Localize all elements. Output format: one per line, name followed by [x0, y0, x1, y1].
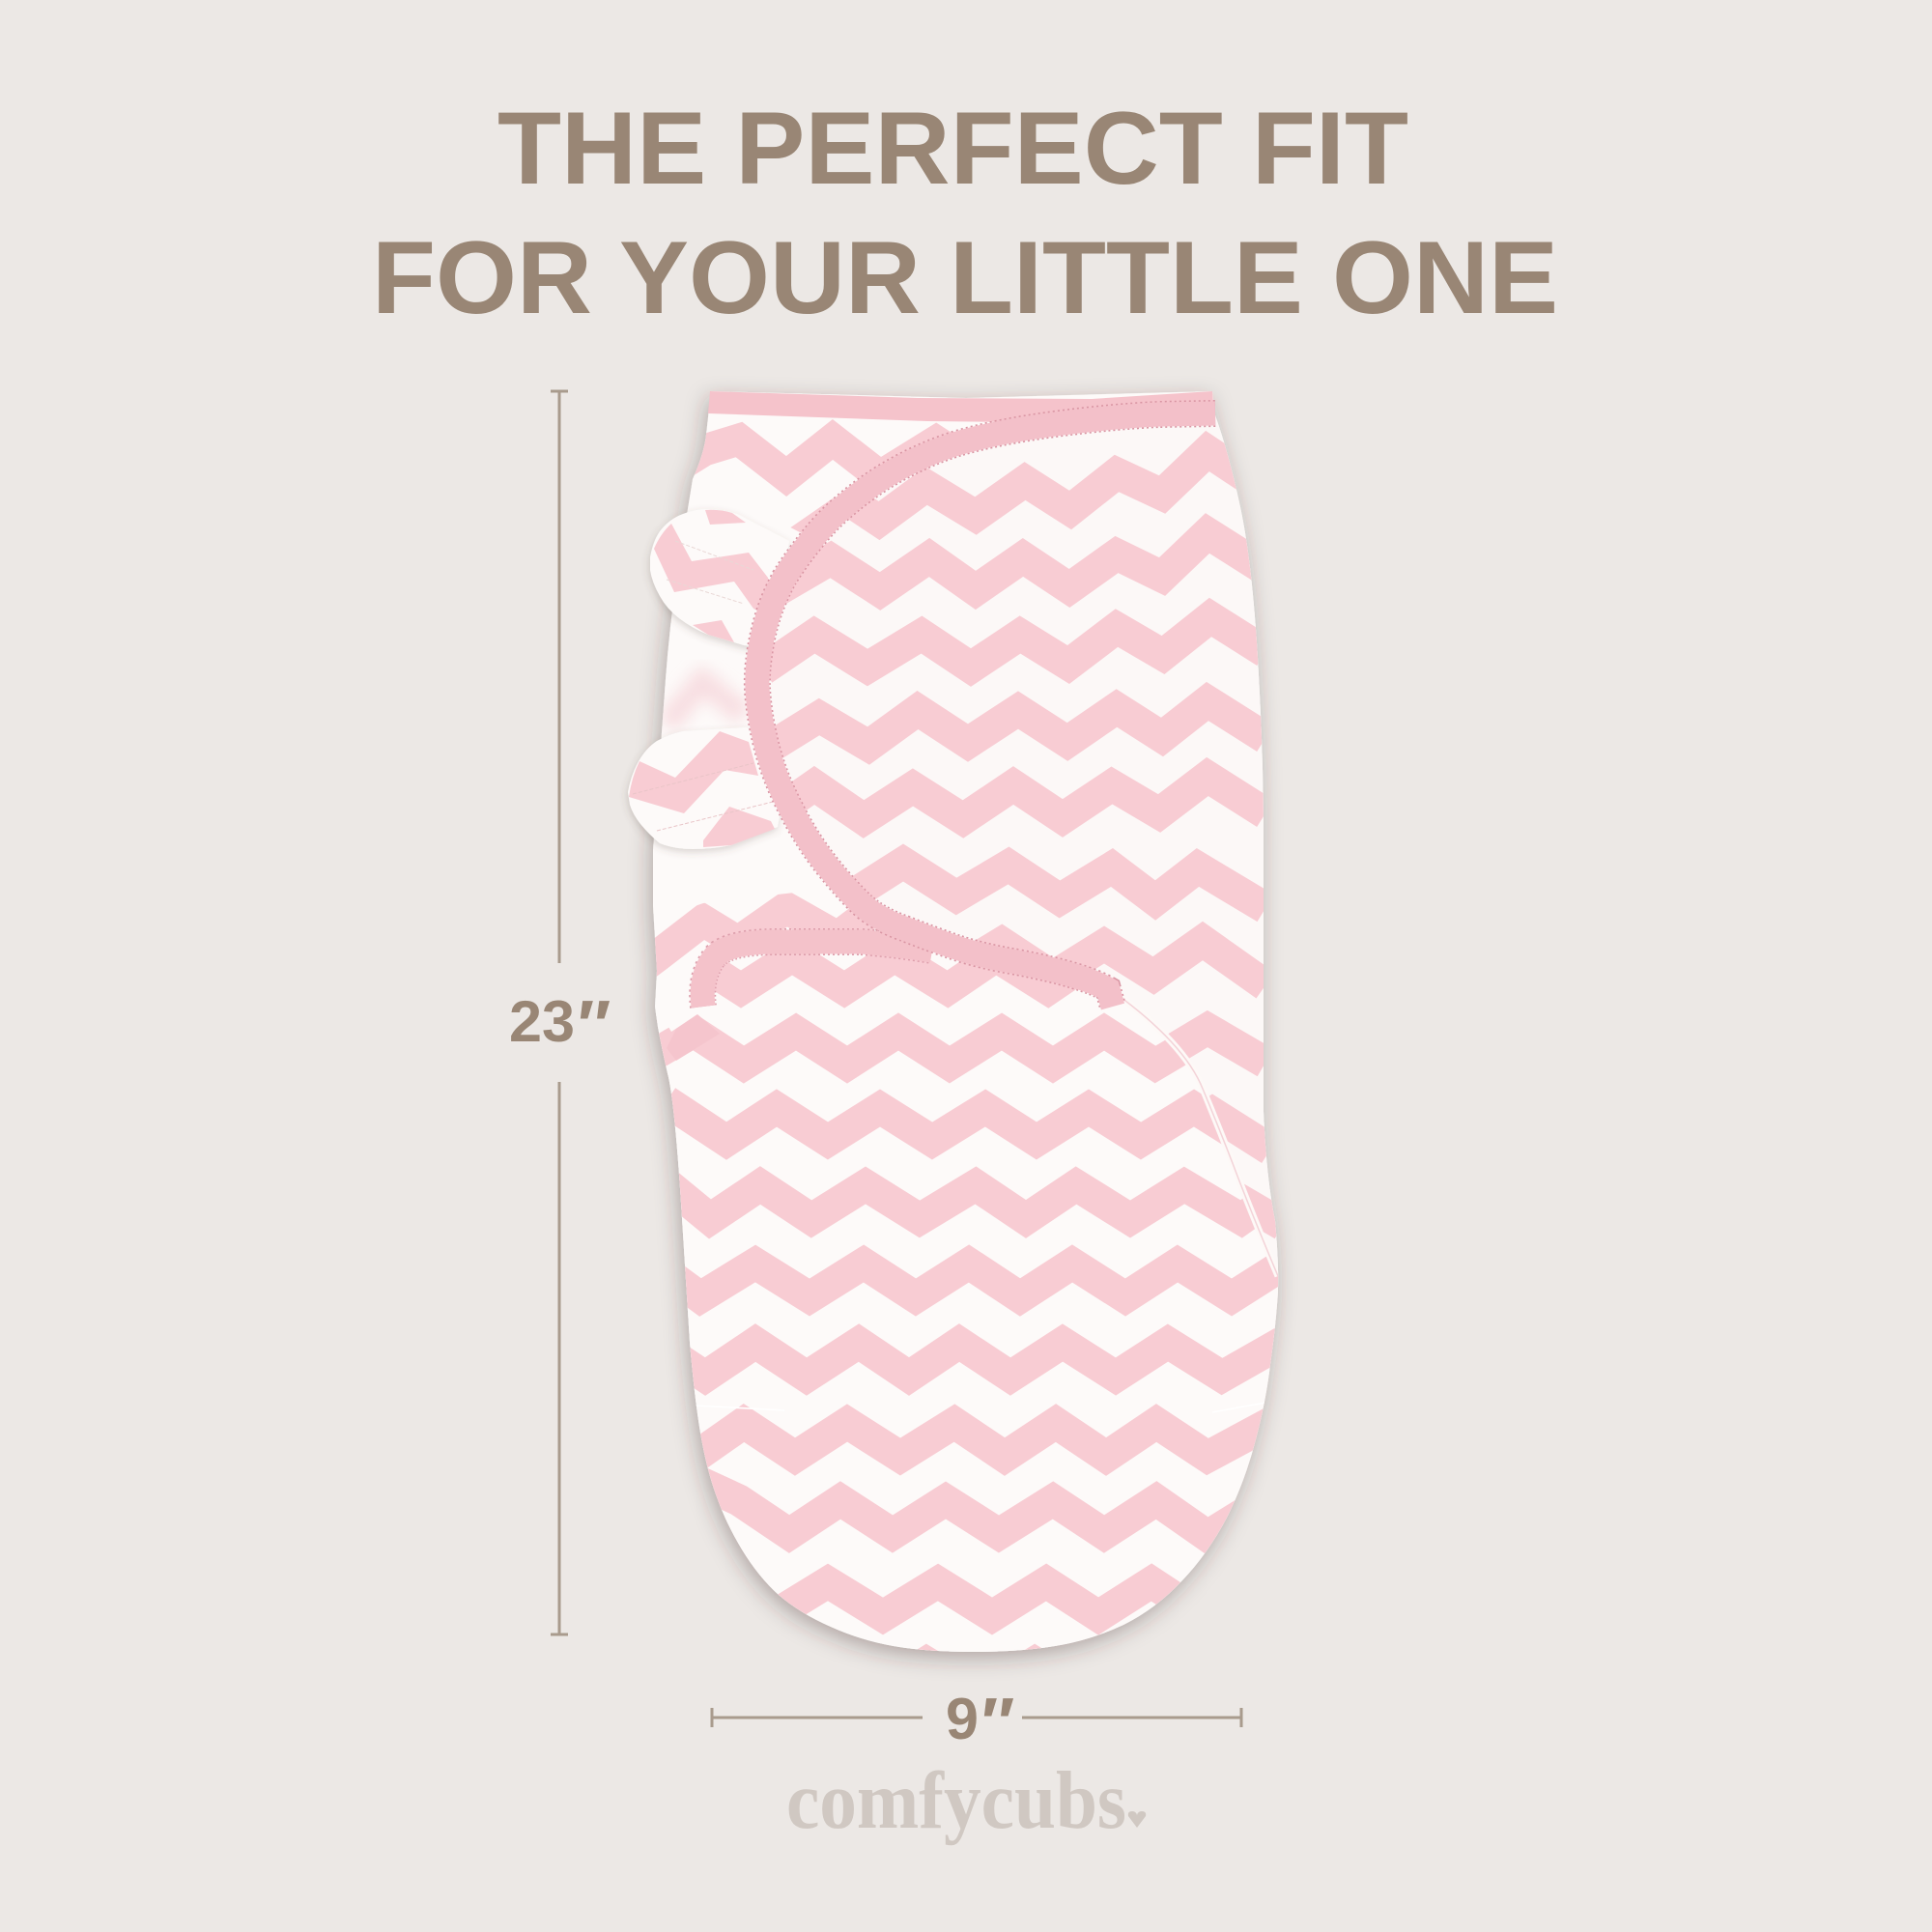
width dimension: 9 inches: ″: [978, 1685, 1014, 1762]
lower pocket: [655, 954, 1278, 1652]
title: THE PERFECT FIT: [497, 90, 1408, 206]
back panel chevrons: [638, 440, 1150, 1065]
pocket side seam: [1165, 1034, 1277, 1277]
title: [372, 90, 1558, 335]
height dimension: 23 inches: ″: [574, 987, 611, 1065]
width dimension: 9 inches: [712, 1685, 1241, 1762]
logo: comfycubs: [786, 1755, 1126, 1846]
front flap binding: [757, 413, 1215, 1007]
upper mitten: [650, 509, 789, 649]
width dimension: 9 inches: 9: [946, 1687, 979, 1751]
top binding band: [708, 391, 1215, 425]
silhouette with shadow: [653, 391, 1278, 1652]
lower mitten: [628, 727, 787, 849]
height dimension: 23 inches: [509, 391, 611, 1634]
lower pocket binding: [702, 942, 932, 1007]
title: FOR YOUR LITTLE ONE: [372, 219, 1558, 335]
swaddle garment: [628, 386, 1314, 1695]
left gather: [668, 1012, 696, 1032]
faint ghost chevron on the back panel: [667, 681, 744, 724]
crease lines: [736, 1406, 753, 1409]
height dimension: 23 inches: 23: [509, 989, 575, 1054]
front flap: [655, 427, 1279, 1652]
